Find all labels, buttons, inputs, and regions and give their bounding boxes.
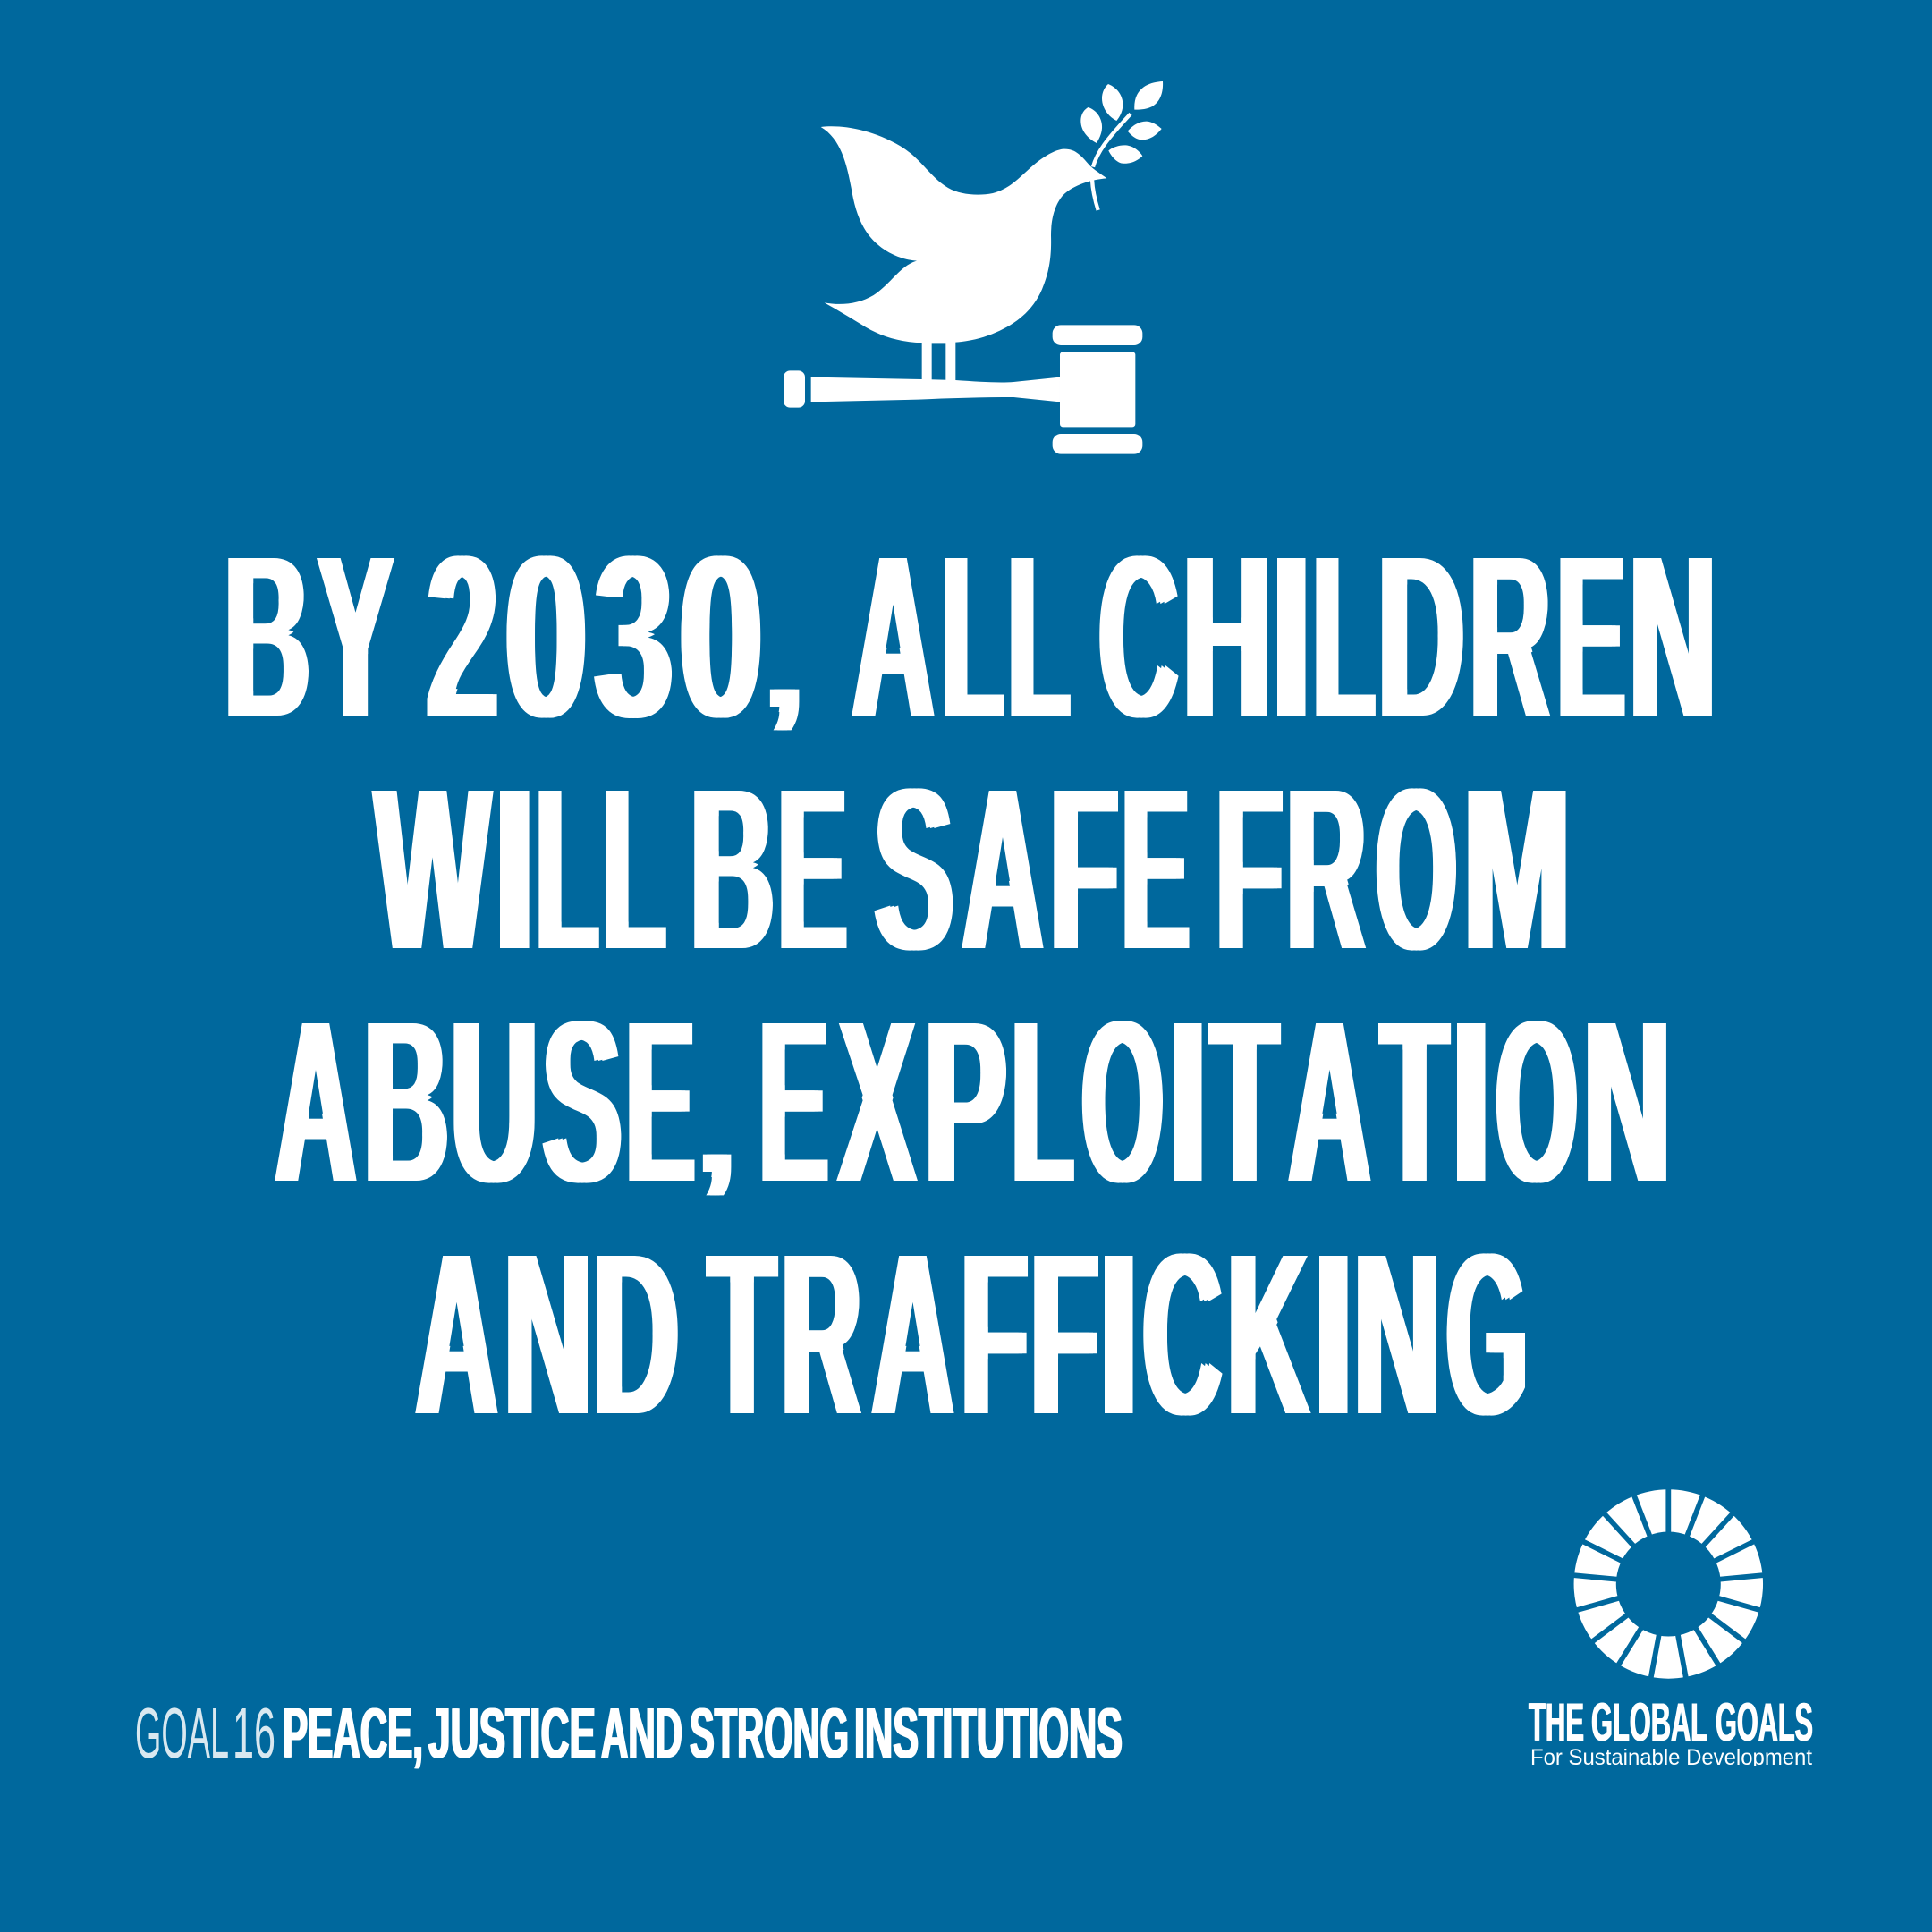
heading line 3: U xyxy=(451,970,538,1234)
heading line 3: E xyxy=(759,970,828,1234)
heading line 2: E xyxy=(778,738,846,1002)
goal name xyxy=(283,1693,1123,1773)
heading line 2: W xyxy=(375,738,491,1002)
heading line 3: S xyxy=(542,970,622,1234)
heading line 2: F xyxy=(1050,738,1118,1002)
heading line 3: , xyxy=(697,1038,737,1208)
heading line 2: E xyxy=(1122,738,1190,1002)
heading line 1: , xyxy=(764,572,805,742)
heading line 4: C xyxy=(1143,1203,1222,1467)
heading line 1: L xyxy=(1313,505,1375,769)
logo title: GLOBAL xyxy=(1591,1692,1707,1752)
heading line 2: I xyxy=(494,738,535,1002)
heading line 1: Y xyxy=(317,505,394,769)
heading line 4: I xyxy=(1099,1203,1139,1467)
heading line 3: P xyxy=(924,970,1006,1234)
heading line 3: L xyxy=(1012,970,1073,1234)
heading line 1: L xyxy=(1008,505,1070,769)
heading line 4: N xyxy=(504,1203,592,1467)
goal number: GOAL xyxy=(135,1693,229,1773)
dove body xyxy=(821,126,1106,343)
heading line 1: B xyxy=(225,505,310,769)
heading line 2: O xyxy=(1376,738,1456,1002)
icon: goals wheel xyxy=(1569,1484,1768,1682)
branch stem xyxy=(1092,114,1131,210)
heading line 3: A xyxy=(275,970,356,1234)
heading line 2: A xyxy=(962,738,1043,1002)
heading line 1: R xyxy=(1470,505,1550,769)
heading line 3: I xyxy=(1168,970,1208,1234)
heading line 3: O xyxy=(1081,970,1163,1234)
heading line 4: F xyxy=(1030,1203,1098,1467)
logo title: THE xyxy=(1529,1692,1584,1752)
goal name: STRONG xyxy=(690,1693,849,1773)
heading line 2 xyxy=(375,738,1571,1002)
logo title: GOALS xyxy=(1716,1692,1813,1752)
goal label xyxy=(135,1693,1123,1773)
logo subtitle: For Sustainable Development xyxy=(1530,1745,1812,1770)
goal name: AND xyxy=(601,1693,682,1773)
heading line 3: N xyxy=(1584,970,1671,1234)
heading line 4: I xyxy=(1314,1203,1353,1467)
heading xyxy=(225,505,1716,1467)
heading line 1: 3 xyxy=(594,505,673,769)
heading line 2: B xyxy=(691,738,774,1002)
heading line 3: T xyxy=(1381,970,1448,1234)
heading line 1: D xyxy=(1378,505,1464,769)
heading line 4: K xyxy=(1227,1203,1310,1467)
icon: dove with olive branch on gavel xyxy=(784,81,1163,454)
heading line 4: D xyxy=(593,1203,679,1467)
heading line 2: M xyxy=(1463,738,1571,1002)
heading line 3: O xyxy=(1496,970,1578,1234)
gavel handle xyxy=(811,377,1060,402)
heading line 3 xyxy=(275,970,1671,1234)
heading line 1: 2 xyxy=(427,505,498,769)
heading line 4: A xyxy=(871,1203,953,1467)
heading line 1: C xyxy=(1099,505,1179,769)
heading line 1: L xyxy=(942,505,1004,769)
heading line 2: L xyxy=(603,738,665,1002)
heading line 1: E xyxy=(1557,505,1624,769)
heading line 3: X xyxy=(837,970,917,1234)
goal number: 16 xyxy=(233,1693,275,1773)
heading line 4: A xyxy=(415,1203,497,1467)
goal name: JUSTICE xyxy=(428,1693,596,1773)
gavel bottom bar xyxy=(1053,434,1142,454)
gavel butt xyxy=(784,370,805,408)
heading line 1: I xyxy=(1272,505,1311,769)
heading: G xyxy=(1446,1203,1528,1467)
heading line 3: T xyxy=(1211,970,1278,1234)
goal name: INSTITUTIONS xyxy=(854,1693,1123,1773)
heading line 3: A xyxy=(1288,970,1370,1234)
heading line 4: F xyxy=(962,1203,1028,1467)
heading line 2: R xyxy=(1286,738,1366,1002)
heading line 2: L xyxy=(536,738,598,1002)
heading line 2: F xyxy=(1216,738,1283,1002)
heading line 1: N xyxy=(1630,505,1716,769)
heading line 4 xyxy=(415,1203,1528,1467)
heading line 3: B xyxy=(364,970,449,1234)
heading line 4: N xyxy=(1354,1203,1440,1467)
logo: the global goals xyxy=(1529,1484,1813,1770)
goal name: PEACE, xyxy=(283,1693,423,1773)
heading line 1: A xyxy=(852,505,934,769)
heading line 1: 0 xyxy=(504,505,588,769)
heading line 2: S xyxy=(874,738,953,1002)
heading line 1: H xyxy=(1182,505,1272,769)
heading line 1: 0 xyxy=(679,505,763,769)
dove legs xyxy=(922,340,955,383)
olive leaves xyxy=(1080,81,1163,164)
gavel head xyxy=(1060,352,1135,427)
gavel top bar xyxy=(1053,325,1142,345)
heading line 4: T xyxy=(708,1203,775,1467)
heading line 3: I xyxy=(1452,970,1491,1234)
heading line 1 xyxy=(225,505,1716,769)
heading line 4: R xyxy=(781,1203,861,1467)
heading line 3: E xyxy=(626,970,694,1234)
